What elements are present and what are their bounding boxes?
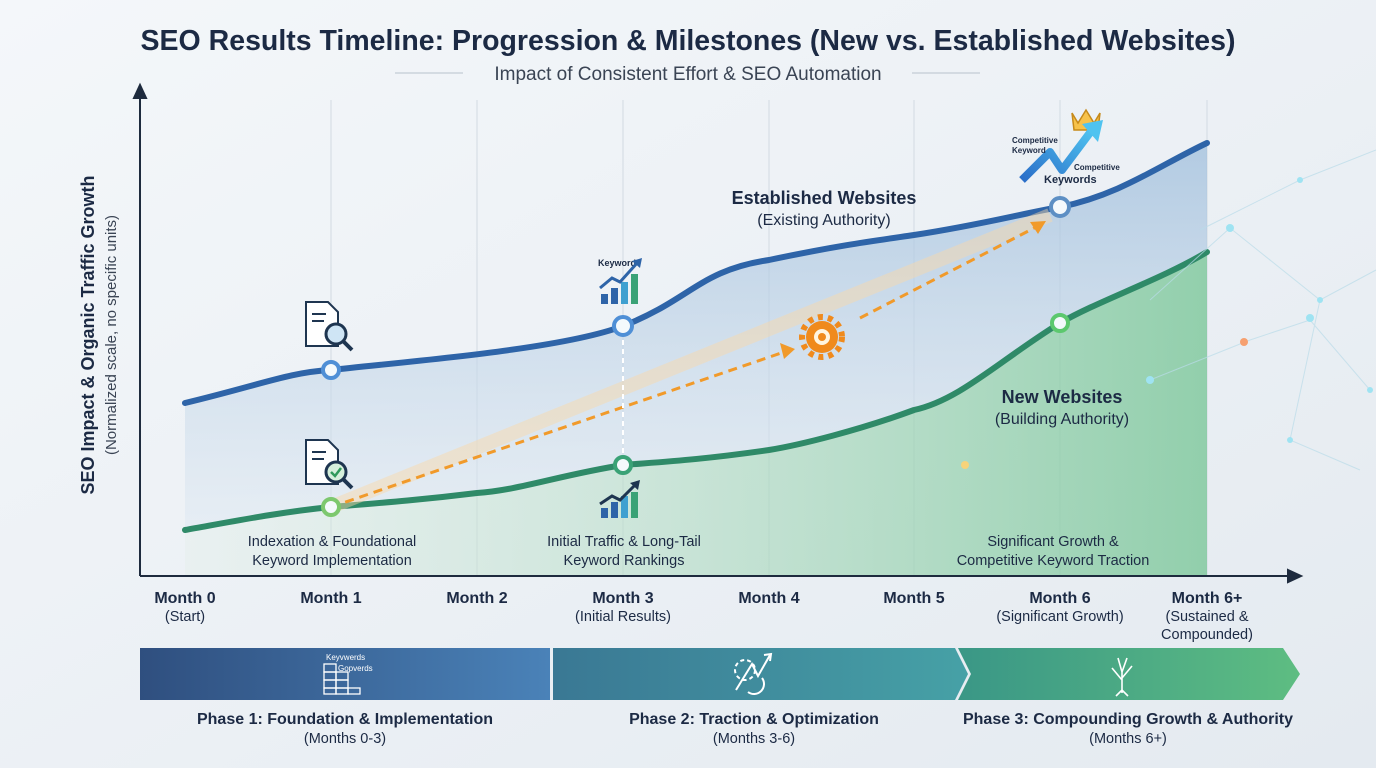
- curve: new: [185, 252, 1207, 530]
- label: established websites: Established Websites: [732, 188, 916, 208]
- subtitle: Impact of Consistent Effort & SEO Automation: [494, 64, 882, 85]
- icon: gear: [802, 317, 842, 357]
- phase band: Keyvwerds: [326, 653, 365, 662]
- milestone labels: Indexation & Foundational: [248, 534, 416, 550]
- phase labels: (Months 0-3): [304, 731, 386, 747]
- month labels: Month 2: [446, 590, 508, 607]
- phase labels: (Months 6+): [1089, 731, 1167, 747]
- curve: established: [185, 143, 1207, 403]
- icon: keyword chart bottom: [600, 480, 640, 518]
- month labels: (Initial Results): [575, 609, 671, 625]
- month labels: [154, 590, 1253, 643]
- icon: competitive keywords: Competitive: [1074, 163, 1120, 172]
- phase labels: (Months 3-6): [713, 731, 795, 747]
- icon: competitive keywords: Keyword: [1012, 146, 1046, 155]
- icon: tree: [1112, 658, 1132, 696]
- y axis label: (Normalized scale, no specific units): [103, 215, 120, 455]
- icon: document search top: [306, 302, 352, 350]
- gridlines: [331, 100, 1207, 576]
- milestone labels: Keyword Rankings: [564, 553, 684, 569]
- milestone labels: Competitive Keyword Traction: [957, 553, 1149, 569]
- icon: competitive keywords: Keywords: [1044, 174, 1097, 186]
- month labels: Month 6: [1029, 590, 1091, 607]
- title: SEO Results Timeline: Progression & Milestones (New vs. Established Websites): [141, 25, 1235, 57]
- network decoration: [1150, 150, 1376, 470]
- area: between curves: [185, 143, 1207, 530]
- milestone labels: [248, 534, 1149, 569]
- month labels: Month 1: [300, 590, 362, 607]
- phase band: [140, 648, 1300, 700]
- label: new websites: [995, 387, 1129, 428]
- month labels: (Significant Growth): [996, 609, 1124, 625]
- phase labels: Phase 2: Traction & Optimization: [629, 711, 879, 728]
- month labels: Compounded): [1161, 627, 1253, 643]
- icon: keyword chart top: Keyword: [598, 258, 636, 268]
- month labels: Month 4: [738, 590, 800, 607]
- area: new websites: [185, 252, 1207, 576]
- month labels: Month 0: [154, 590, 216, 607]
- axes: [134, 85, 1301, 582]
- icon: gear growth: [735, 654, 771, 694]
- y axis label: SEO Impact & Organic Traffic Growth: [78, 175, 98, 495]
- phase labels: Phase 3: Compounding Growth & Authority: [963, 711, 1293, 728]
- month labels: (Start): [165, 609, 205, 625]
- phase labels: Phase 1: Foundation & Implementation: [197, 711, 493, 728]
- label: established websites: (Existing Authority): [757, 212, 891, 229]
- markers: [323, 198, 1069, 515]
- icon: competitive keywords: Competitive: [1012, 136, 1058, 145]
- month labels: Month 5: [883, 590, 945, 607]
- label: new websites: New Websites: [1002, 387, 1122, 407]
- icon: competitive keywords: [1012, 110, 1120, 186]
- month labels: Month 6+: [1172, 590, 1242, 607]
- month labels: (Sustained &: [1165, 609, 1249, 625]
- month labels: Month 3: [592, 590, 654, 607]
- milestone labels: Initial Traffic & Long-Tail: [547, 534, 701, 550]
- phase band: Gopverds: [338, 664, 373, 673]
- label: new websites: (Building Authority): [995, 411, 1129, 428]
- automation arrow: [331, 215, 1050, 507]
- icon: document search bottom: [306, 440, 352, 488]
- milestone labels: Significant Growth &: [987, 534, 1119, 550]
- icon: keyword chart top: [598, 258, 642, 304]
- label: established websites: [732, 188, 916, 229]
- y axis label: [78, 175, 120, 495]
- phase labels: [197, 711, 1293, 747]
- icon: bricks: [324, 664, 360, 694]
- milestone labels: Keyword Implementation: [252, 553, 412, 569]
